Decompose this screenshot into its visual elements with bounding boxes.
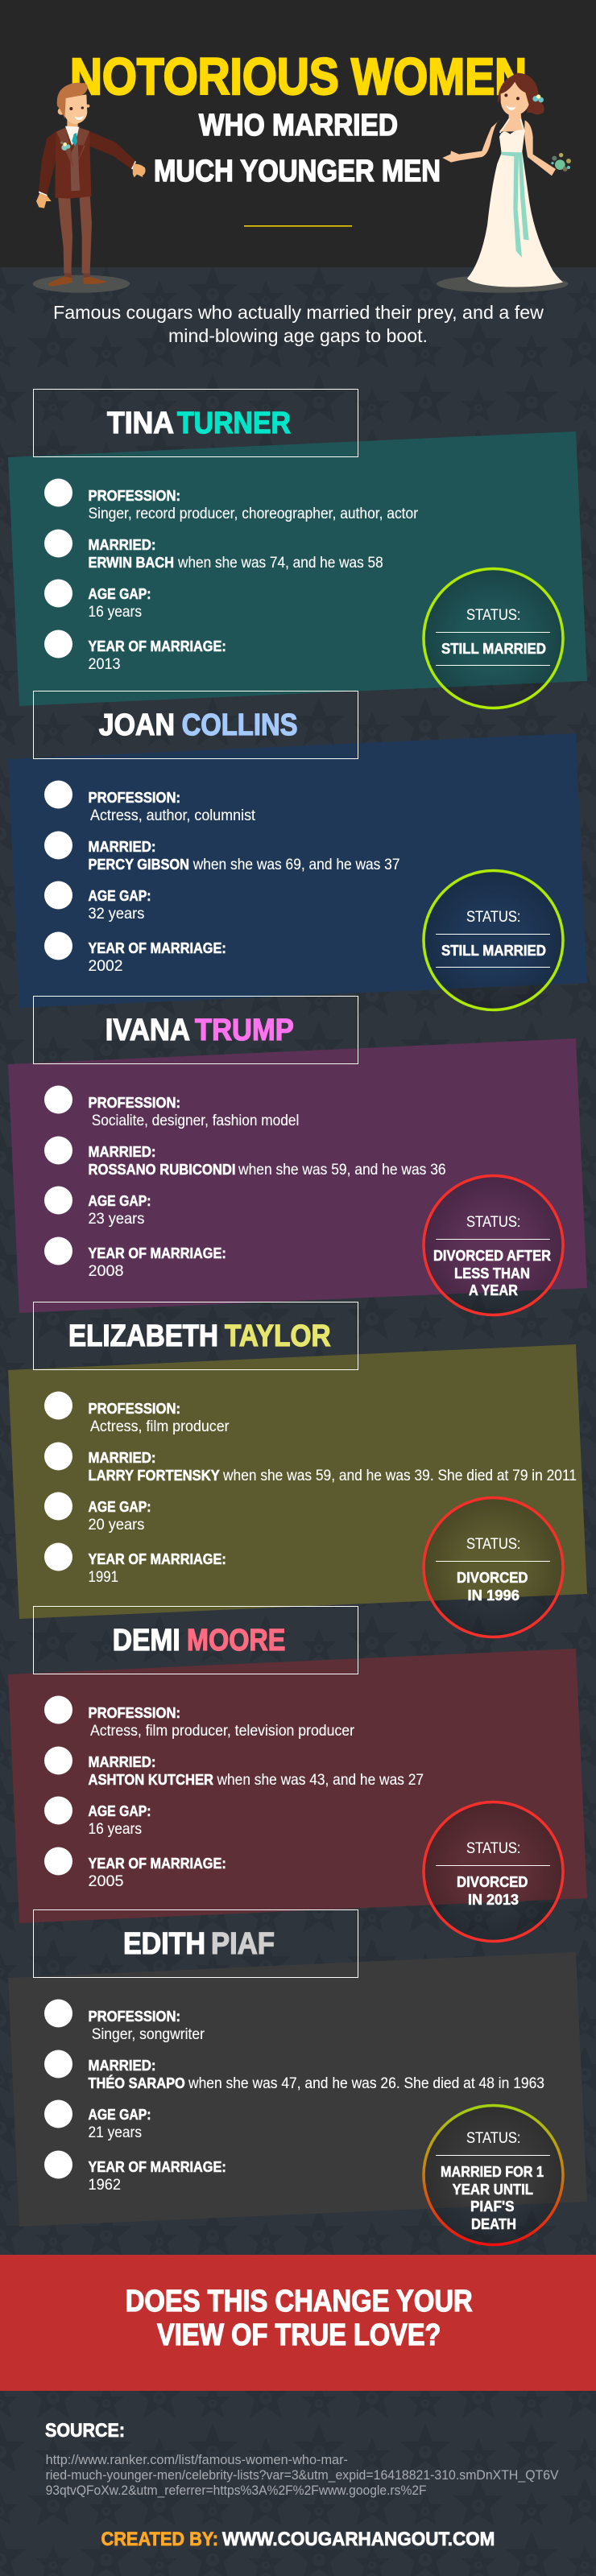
row: profession [44, 1695, 355, 1740]
status badge: STATUS: [466, 607, 520, 624]
row: year of marriage: 2005 [89, 1873, 124, 1890]
subtitle: Famous cougars who actually married their prey, and a few [53, 302, 544, 323]
row: married: LARRY FORTENSKY [89, 1467, 220, 1484]
row: year of marriage: YEAR OF MARRIAGE: [89, 939, 226, 956]
section: Tina Turner [8, 390, 587, 708]
status badge: STATUS: [466, 1840, 520, 1857]
row: married: MARRIED: [89, 2057, 156, 2074]
status badge: STATUS: [466, 1536, 520, 1553]
row: age gap [44, 881, 151, 923]
row: age gap [44, 1797, 151, 1838]
status badge: STATUS: [466, 1214, 520, 1231]
row: year of marriage [44, 2151, 226, 2194]
illustration: groom [33, 83, 146, 293]
title line: who married: WHO MARRIED [199, 109, 398, 142]
section: Demi Moore [8, 1607, 587, 1942]
row: married: MARRIED: [89, 1753, 156, 1770]
credit [101, 2529, 495, 2550]
row: married [44, 831, 399, 873]
credit: WWW.COUGARHANGOUT.COM [222, 2529, 495, 2550]
row: age gap: 16 years [89, 1821, 142, 1838]
row: married [44, 2050, 544, 2092]
status badge: STATUS: [466, 2130, 520, 2147]
name box: TURNER [177, 407, 291, 440]
name box: TRUMP [195, 1013, 294, 1047]
row: year of marriage: YEAR OF MARRIAGE: [89, 638, 226, 654]
row: age gap [44, 580, 151, 621]
name box: JOAN [99, 708, 175, 742]
row: profession [44, 2000, 205, 2043]
row: married: when she was 43, and he was 27 [217, 1772, 424, 1789]
row: profession [44, 781, 256, 824]
row: married: when she was 59, and he was 36 [238, 1162, 446, 1179]
status badge: PIAF'S [470, 2198, 514, 2215]
section: Edith Piaf [8, 1909, 587, 2244]
row: profession: PROFESSION: [89, 789, 180, 806]
status badge: MARRIED FOR 1 [441, 2163, 544, 2180]
row: married [44, 1443, 577, 1484]
row: profession: Singer, record producer, choreographer, author, actor [89, 506, 419, 522]
panel: Demi Moore [8, 1649, 587, 1923]
status badge [424, 1497, 563, 1637]
panel: Joan Collins [8, 733, 587, 1008]
panel: Elizabeth Taylor [8, 1344, 587, 1619]
header band [0, 0, 596, 267]
row: profession: Singer, songwriter [92, 2026, 205, 2043]
row: age gap [44, 1187, 151, 1228]
status badge: DIVORCED AFTER [433, 1247, 551, 1264]
title line: much younger men: MUCH YOUNGER MEN [154, 155, 441, 188]
row: profession [44, 1391, 230, 1435]
name box: EDITH [123, 1927, 205, 1961]
title underline [244, 225, 352, 227]
name box [34, 1302, 358, 1370]
row: age gap: AGE GAP: [89, 1192, 151, 1209]
row: age gap: AGE GAP: [89, 1498, 151, 1515]
call to action banner: VIEW OF TRUE LOVE? [157, 2318, 441, 2352]
status badge [424, 1802, 563, 1942]
source url: http://www.ranker.com/list/famous-women-who-mar- [46, 2453, 348, 2467]
status badge: IN 1996 [467, 1587, 519, 1604]
row: profession [44, 1085, 299, 1129]
row: married: THÉO SARAPO [89, 2074, 185, 2091]
row: profession: PROFESSION: [89, 487, 180, 504]
status badge: DEATH [471, 2215, 516, 2232]
row: married: ERWIN BACH [89, 554, 174, 571]
status badge [424, 568, 563, 708]
row: year of marriage: YEAR OF MARRIAGE: [89, 1550, 226, 1567]
call to action banner [0, 2255, 596, 2391]
row: married: PERCY GIBSON [89, 856, 189, 873]
illustration: bride [437, 73, 571, 293]
name box: TAYLOR [225, 1319, 331, 1353]
row: age gap: 20 years [89, 1517, 144, 1534]
panel: Ivana Trump [8, 1038, 587, 1313]
row: year of marriage: YEAR OF MARRIAGE: [89, 2158, 226, 2175]
name box [34, 390, 358, 457]
row: profession: PROFESSION: [89, 1400, 180, 1417]
source url: 93qtvQFoXw.2&utm_referrer=https%3A%2F%2Fwww.google.rs%2F [46, 2483, 427, 2498]
status badge: STILL MARRIED [441, 942, 546, 959]
section: Ivana Trump [8, 997, 587, 1315]
status badge: STILL MARRIED [441, 640, 546, 657]
status badge [424, 2106, 563, 2244]
row: year of marriage [44, 1847, 226, 1890]
section: Elizabeth Taylor [8, 1302, 587, 1637]
row: profession: PROFESSION: [89, 2008, 180, 2025]
source url: ried-much-younger-men/celebrity-lists?var=3&utm_expid=16418821-310.smDnXTH_QT6V [46, 2468, 559, 2483]
row: profession: Actress, film producer [90, 1418, 230, 1435]
name box: IVANA [106, 1013, 190, 1047]
row: profession: Socialite, designer, fashion model [92, 1113, 299, 1129]
row: profession: PROFESSION: [89, 1094, 180, 1111]
row: married [44, 530, 383, 572]
section: Joan Collins [8, 691, 587, 1009]
row: married: MARRIED: [89, 838, 156, 855]
status badge [424, 1175, 563, 1315]
row: year of marriage: 2013 [89, 656, 121, 673]
row: year of marriage [44, 630, 226, 673]
row: age gap: 21 years [89, 2124, 142, 2141]
row: year of marriage [44, 932, 226, 975]
row: age gap: AGE GAP: [89, 585, 151, 602]
status badge [424, 871, 563, 1009]
subtitle: mind-blowing age gaps to boot. [168, 325, 428, 346]
row: year of marriage [44, 1542, 226, 1586]
row: year of marriage: 2008 [89, 1263, 124, 1280]
panel: Edith Piaf [8, 1952, 587, 2227]
status badge: STATUS: [466, 909, 520, 926]
row: year of marriage: YEAR OF MARRIAGE: [89, 1245, 226, 1261]
row: age gap: 16 years [89, 604, 142, 621]
title [70, 47, 527, 188]
name box [34, 1607, 358, 1674]
name box: COLLINS [182, 708, 298, 742]
row: year of marriage: YEAR OF MARRIAGE: [89, 1855, 226, 1872]
row: married: ASHTON KUTCHER [89, 1771, 213, 1788]
name box [34, 691, 358, 758]
subtitle [53, 302, 544, 346]
row: year of marriage: 1991 [89, 1569, 118, 1586]
row: married: when she was 74, and he was 58 [177, 555, 383, 572]
row: year of marriage: 1962 [89, 2177, 121, 2194]
row: married [44, 1747, 424, 1789]
name box [34, 1909, 358, 1977]
row: profession: Actress, author, columnist [90, 807, 256, 824]
status badge: IN 2013 [468, 1891, 519, 1908]
row: profession: Actress, film producer, television producer [90, 1723, 355, 1740]
row: age gap: 23 years [89, 1211, 144, 1228]
name box: ELIZABETH [68, 1319, 218, 1353]
row: married: when she was 47, and he was 26. She died at 48 in 1963 [188, 2075, 544, 2092]
row: married: MARRIED: [89, 1449, 156, 1466]
row: age gap: AGE GAP: [89, 1802, 151, 1819]
status badge: LESS THAN [454, 1265, 530, 1282]
row: age gap: AGE GAP: [89, 2106, 151, 2123]
status badge: DIVORCED [457, 1569, 528, 1586]
source url [46, 2453, 559, 2498]
row: married: ROSSANO RUBICONDI [89, 1161, 235, 1178]
row: year of marriage: 2002 [89, 958, 122, 975]
name box: MOORE [187, 1624, 285, 1657]
row: married [44, 1137, 446, 1179]
row: age gap [44, 1492, 151, 1534]
row: profession [44, 478, 419, 522]
row: age gap [44, 2099, 151, 2141]
row: year of marriage [44, 1236, 226, 1280]
source heading: SOURCE: [45, 2420, 125, 2442]
status badge: YEAR UNTIL [453, 2181, 533, 2198]
source [45, 2420, 559, 2498]
name box: TINA [107, 407, 174, 440]
status badge: DIVORCED [457, 1873, 528, 1890]
name box: DEMI [113, 1624, 180, 1657]
call to action banner: DOES THIS CHANGE YOUR [126, 2285, 473, 2318]
name box [34, 997, 358, 1064]
row: married: MARRIED: [89, 1143, 156, 1160]
row: age gap: AGE GAP: [89, 887, 151, 904]
row: married: MARRIED: [89, 536, 156, 553]
row: married: when she was 69, and he was 37 [192, 857, 399, 873]
row: profession: PROFESSION: [89, 1704, 180, 1721]
title line: notorious women: NOTORIOUS WOMEN [70, 47, 527, 105]
name box: PIAF [211, 1927, 275, 1961]
status badge: A YEAR [469, 1282, 518, 1298]
panel: Tina Turner [8, 431, 587, 706]
row: age gap: 32 years [89, 906, 144, 923]
credit: CREATED BY: [101, 2529, 218, 2550]
